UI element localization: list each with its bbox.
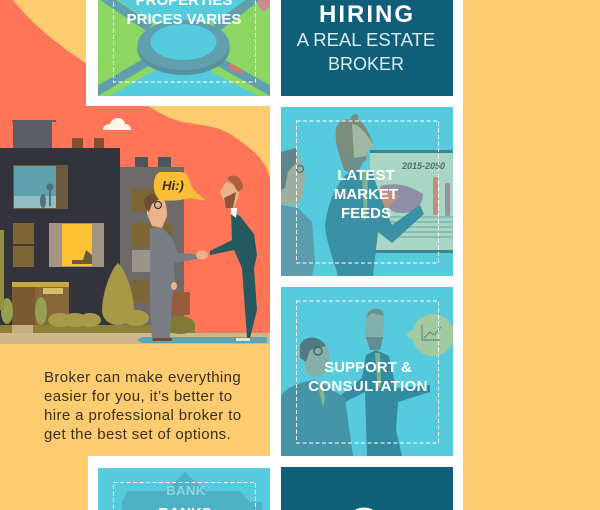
label: MARKET	[334, 186, 398, 203]
dashed frame	[296, 301, 438, 443]
ground	[0, 333, 270, 344]
upper window	[13, 165, 68, 209]
garage	[12, 282, 69, 325]
bushes	[0, 230, 195, 334]
dashed frame	[296, 121, 438, 263]
broker: BROKER	[328, 54, 404, 74]
floor shadow	[138, 337, 267, 343]
label: LATEST	[337, 167, 395, 184]
panel: bottom dark card	[281, 467, 453, 510]
panel: banks	[98, 468, 270, 510]
text block: broker advice: Broker can make everything	[44, 369, 241, 386]
speech bubble	[405, 314, 454, 356]
bank sign: BANK	[166, 483, 206, 498]
house marker	[258, 0, 270, 12]
a real estate: A REAL ESTATE	[297, 29, 435, 50]
illustration: houses and brokers	[0, 118, 270, 344]
briefcase	[167, 292, 190, 315]
bank building	[122, 472, 262, 510]
chart board	[370, 150, 453, 253]
tall man	[340, 308, 430, 456]
heading line 2: PRICES VARIES	[127, 11, 241, 28]
coral blob	[0, 0, 270, 344]
panel: properties prices varies	[92, 0, 276, 96]
text block: broker advice	[44, 369, 242, 443]
label	[308, 362, 426, 391]
dark house	[0, 148, 120, 325]
text block: broker advice: hire a professional broker to	[44, 407, 242, 424]
balcony	[132, 250, 152, 272]
roundabout	[138, 46, 230, 75]
pond	[150, 24, 216, 60]
grey broker	[144, 194, 197, 341]
hiring: HIRING	[319, 1, 415, 28]
label: CONSULTATION	[308, 378, 428, 395]
label	[334, 170, 398, 218]
teal broker	[210, 176, 257, 341]
left window	[13, 223, 34, 267]
grey house	[119, 167, 184, 325]
lit window	[49, 223, 104, 267]
white frame bottom	[88, 456, 278, 510]
white frame top	[86, 0, 276, 106]
water bottom	[110, 70, 258, 96]
glasses man	[281, 338, 353, 456]
label: FEEDS	[341, 205, 391, 222]
dashed frame	[114, 482, 256, 510]
cloud	[103, 118, 131, 130]
white column	[270, 0, 463, 510]
roads	[92, 0, 276, 94]
chart board: 2015-2050	[401, 161, 445, 171]
grey house windows	[132, 189, 172, 303]
panel: latest market feeds	[281, 107, 453, 276]
pavement strip	[12, 325, 33, 333]
icon circle	[348, 509, 380, 510]
chimneys	[72, 138, 83, 148]
car	[228, 63, 243, 74]
text block: broker advice: get the best set of options.	[44, 426, 231, 443]
speech bubble: Hi: Hi:)	[162, 178, 184, 193]
rooftop box	[13, 121, 52, 148]
label: SUPPORT &	[324, 359, 412, 376]
panel: hiring a real estate broker	[281, 0, 453, 96]
handshake	[196, 250, 208, 260]
dashed frame	[114, 0, 256, 82]
man with glasses	[281, 148, 315, 276]
speech bubble: Hi	[154, 172, 207, 201]
man with beard	[325, 114, 424, 276]
hedge base	[33, 325, 195, 333]
water top	[118, 0, 250, 22]
panel: support and consultation	[281, 287, 454, 456]
text block: broker advice: easier for you, it’s better to	[44, 388, 232, 405]
